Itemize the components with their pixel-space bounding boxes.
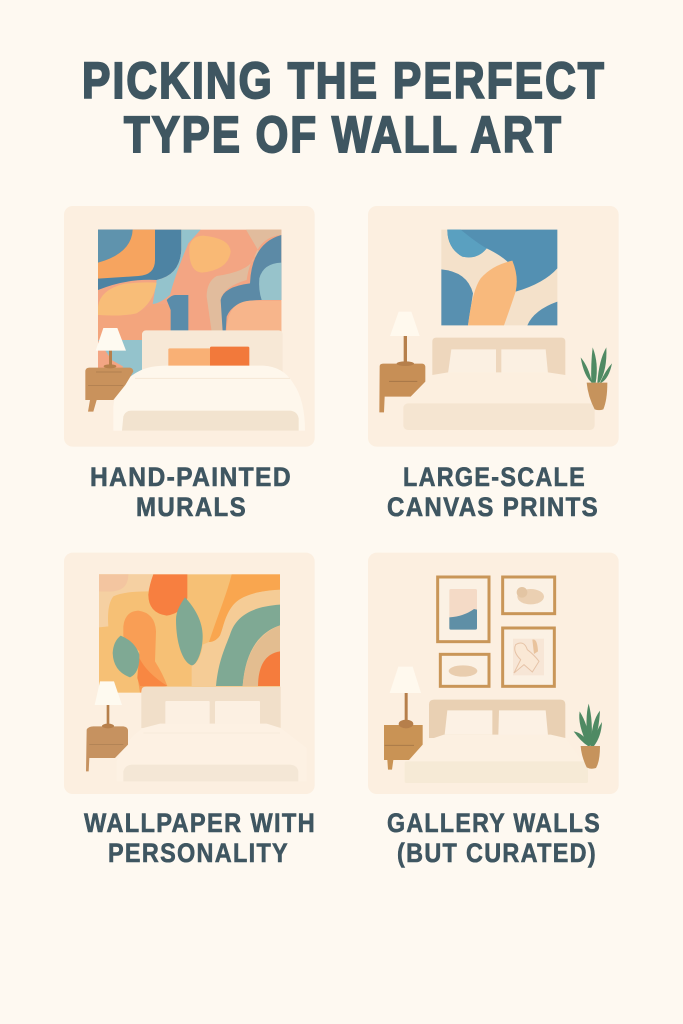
label: gallery walls (but curated): (BUT CURATED) [397,838,597,868]
panel: wallpaper with personality [64,553,315,794]
potted plant [574,704,602,769]
lamp [96,328,126,368]
mural artwork [98,230,281,377]
label: large-scale canvas prints: CANVAS PRINTS [387,492,599,522]
wallpaper artwork [99,574,280,693]
label: large-scale canvas prints [387,462,599,522]
pillows [448,349,548,373]
lamp [390,312,420,366]
potted plant [581,347,612,410]
panel: hand-painted murals [64,206,315,447]
label: large-scale canvas prints: LARGE-SCALE [403,462,586,492]
label: wallpaper with personality [84,808,316,868]
framed art: bottom left small [440,654,489,686]
lamp [95,681,122,728]
label: gallery walls (but curated): GALLERY WALLS [387,808,601,838]
headboard [141,687,281,728]
nightstand [384,725,423,770]
headboard [142,330,283,377]
label: hand-painted murals [90,462,292,522]
nightstand [379,364,425,412]
bed [403,372,595,430]
framed art: top right [503,577,555,614]
nightstand [85,368,133,412]
lamp [390,667,421,728]
label: wallpaper with personality: PERSONALITY [108,838,289,868]
panel: gallery walls [368,553,619,794]
pillows [165,701,260,724]
pillows [168,347,249,369]
bed [113,366,305,431]
label: hand-painted murals: MURALS [136,492,247,522]
headboard [429,700,565,738]
framed art: line figure [503,628,554,686]
label: hand-painted murals: HAND-PAINTED [90,462,292,492]
label: gallery walls (but curated) [387,808,601,868]
bed [117,724,307,781]
nightstand [86,726,128,771]
bed [405,735,588,783]
label: wallpaper with personality: WALLPAPER WITH [84,808,316,838]
canvas artwork [441,230,557,325]
title: TYPE OF WALL ART [124,106,563,163]
headboard [432,338,565,375]
framed art: tall abstract [438,577,489,642]
pillows [445,710,548,735]
panel: large-scale canvas prints [368,206,619,447]
title [82,52,606,163]
